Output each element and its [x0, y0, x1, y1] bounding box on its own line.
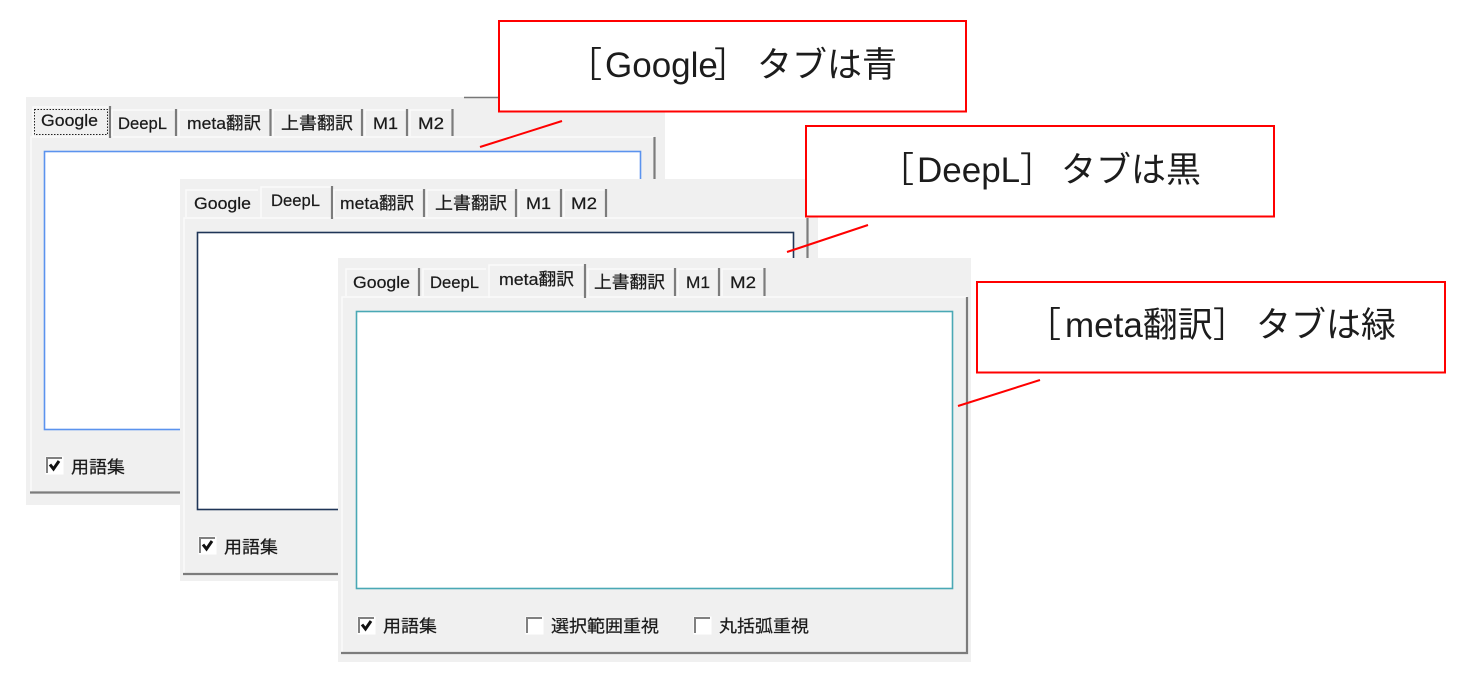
tab: meta翻訳 selected — [489, 264, 585, 298]
callout: DeepL tab is black: タブは黒 — [1061, 151, 1201, 190]
callout line: meta翻訳 — [958, 380, 1040, 406]
callout: DeepL tab is black: ］ — [1020, 151, 1055, 190]
tab: M1: M1 — [526, 194, 551, 213]
tab: 上書翻訳: 上書翻訳 — [594, 273, 665, 292]
tab: M1 — [519, 189, 561, 217]
callout: meta翻訳 tab is green: meta翻訳 — [1065, 306, 1213, 345]
text area: blue border — [44, 152, 640, 430]
tab: DeepL: DeepL — [118, 114, 167, 133]
tab: DeepL selected — [261, 186, 332, 219]
callout line: Google — [480, 121, 562, 147]
callout: DeepL tab is black: DeepL — [917, 151, 1020, 190]
tab: 上書翻訳 — [273, 109, 362, 136]
tab: Google — [346, 268, 419, 296]
tab: 上書翻訳 — [588, 268, 675, 296]
tab: meta翻訳: meta翻訳 — [340, 194, 414, 213]
callout: Google tab is blue: ［ — [567, 46, 602, 85]
tab pane frame — [30, 137, 654, 492]
tab: DeepL — [112, 109, 176, 136]
tab: M2 — [564, 189, 606, 217]
callout: meta翻訳 tab is green: ］ — [1213, 306, 1248, 345]
panel: meta翻訳 tab window — [338, 258, 971, 662]
tab: DeepL selected: DeepL — [271, 191, 320, 210]
tab: 上書翻訳: 上書翻訳 — [435, 194, 507, 213]
tab: M2 — [410, 109, 452, 136]
tab: meta翻訳 — [179, 109, 270, 136]
callout: meta翻訳 tab is green — [977, 282, 1445, 372]
callout: Google tab is blue: ］ — [714, 46, 749, 85]
checkbox: 丸括弧重視: 丸括弧重視 — [719, 617, 809, 636]
checkbox: 用語集: 用語集 — [71, 458, 125, 477]
checkbox: 用語集: 用語集 — [383, 617, 437, 636]
callout: meta翻訳 tab is green: タブは緑 — [1256, 306, 1396, 345]
callout: DeepL tab is black — [806, 126, 1274, 216]
tab: M1 — [678, 268, 719, 296]
tab: 上書翻訳 — [427, 189, 516, 217]
tab: DeepL — [423, 269, 486, 296]
callout line: DeepL — [787, 225, 868, 252]
tab: M1: M1 — [373, 114, 398, 133]
tab: Google — [186, 190, 258, 217]
callout: meta翻訳 tab is green: ［ — [1026, 306, 1061, 345]
tab: M2: M2 — [730, 273, 756, 292]
tab: M1 — [365, 109, 407, 136]
tab: M1: M1 — [686, 273, 710, 292]
tab: meta翻訳 — [334, 189, 424, 217]
tab: Google selected: Google — [41, 111, 98, 130]
checkbox: 用語集: 用語集 — [224, 538, 278, 557]
tab: Google: Google — [353, 273, 410, 292]
tab: meta翻訳 selected: meta翻訳 — [499, 270, 574, 289]
tab: M2: M2 — [571, 194, 597, 213]
panel: DeepL tab window — [180, 179, 818, 581]
text area: dark navy border — [198, 232, 794, 510]
text area: teal border — [356, 312, 952, 588]
tab pane frame — [183, 218, 808, 574]
callout: Google tab is blue: タブは青 — [757, 46, 897, 85]
tab pane frame — [341, 297, 967, 653]
tab: Google: Google — [194, 194, 251, 213]
checkbox: 用語集 — [199, 537, 278, 557]
tab: DeepL: DeepL — [430, 273, 479, 292]
tab: M2: M2 — [418, 114, 444, 133]
checkbox: 用語集 — [358, 617, 437, 636]
tab: Google selected — [33, 106, 110, 138]
tab: meta翻訳: meta翻訳 — [187, 114, 261, 133]
callout: DeepL tab is black: ［ — [879, 151, 914, 190]
callout: Google tab is blue: Google — [605, 46, 718, 85]
panel: Google tab window — [26, 97, 665, 505]
tab: M2 — [722, 268, 764, 296]
checkbox: 用語集 — [46, 457, 125, 477]
checkbox: 選択範囲重視: 選択範囲重視 — [551, 617, 659, 636]
tab: 上書翻訳: 上書翻訳 — [281, 114, 353, 133]
callout: Google tab is blue — [499, 21, 966, 112]
